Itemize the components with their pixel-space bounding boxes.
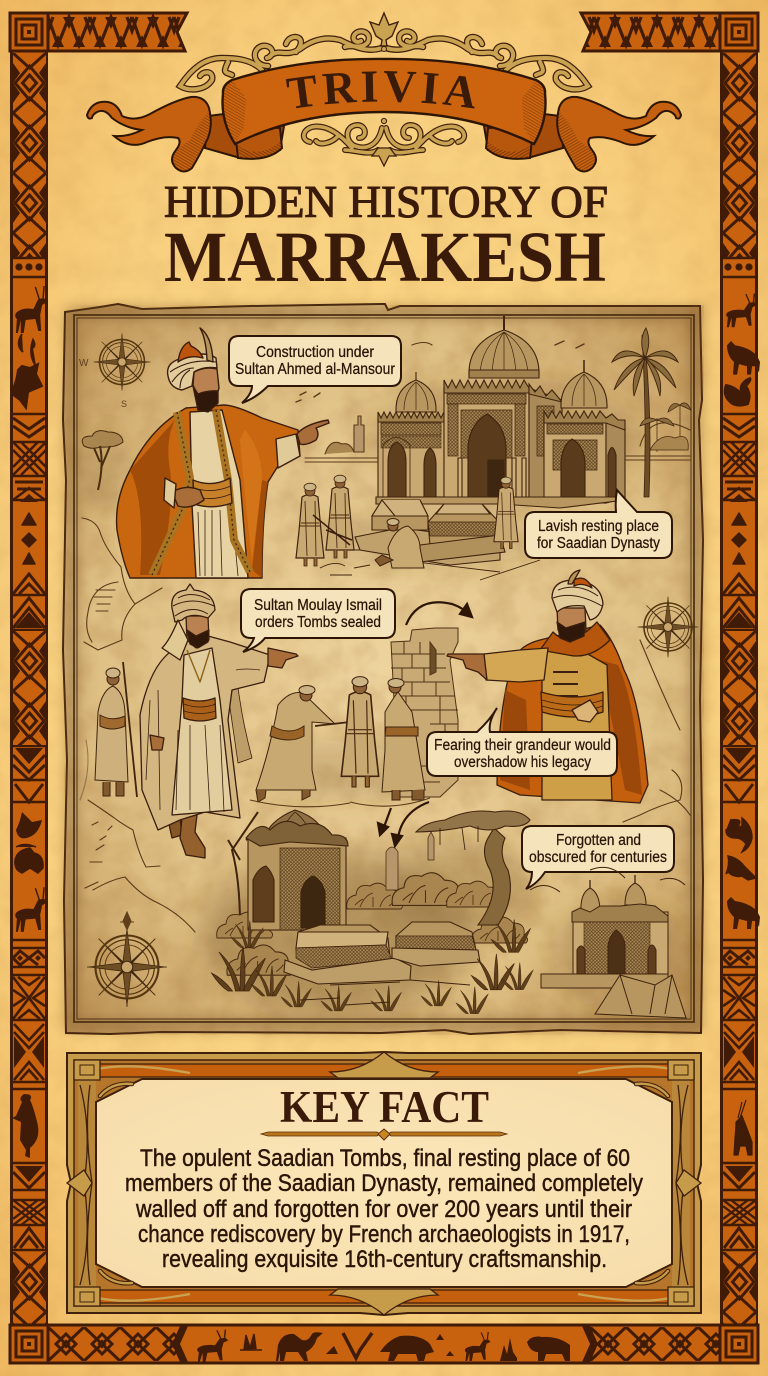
sarcophagus large: [284, 925, 411, 984]
ribbon shading: [222, 80, 546, 144]
key fact text: [125, 1145, 643, 1273]
right pavilion: [376, 360, 625, 508]
robe fold shading: [130, 420, 268, 578]
illustration: tombs under construction: [320, 500, 540, 580]
map frame lines: [74, 315, 694, 1022]
under-tunic: [172, 648, 232, 815]
background skyline with minaret and wall: [296, 341, 690, 462]
beard: [193, 386, 218, 412]
illustration: overgrown ruins: [212, 810, 533, 1014]
icon: compass rose top left: [79, 334, 150, 409]
workers group one: [296, 475, 518, 568]
figure: Sultan Ahmed al-Mansour: [117, 328, 329, 578]
bottom band with animals: [10, 1325, 758, 1363]
icon: compass rose top left: S: [121, 399, 127, 409]
title line 2: MARRAKESH: [164, 217, 606, 297]
cape: [497, 625, 648, 803]
icon: palm trees: [612, 328, 691, 497]
distant spire: [386, 832, 434, 890]
worker standing: [341, 677, 379, 787]
callout: resting place: for Saadian Dynasty: [537, 535, 660, 552]
callout: fearing grandeur: Fearing their grandeur would: [434, 737, 611, 754]
sash: [183, 698, 216, 721]
illustration: Saadian mausoleum complex: [376, 316, 625, 508]
main ribbon: [222, 59, 546, 144]
callout: resting place: [525, 490, 672, 558]
robe: [117, 405, 300, 578]
figure: Sultan Moulay Ismail: [140, 584, 298, 858]
panel: key fact: [67, 1052, 701, 1315]
corner scrollwork: [100, 1084, 668, 1283]
top right band: [581, 13, 758, 51]
foreground plants: [212, 919, 533, 1014]
figure: guard with spear: [95, 662, 137, 797]
workers walling up the tomb: [250, 628, 458, 807]
face and beard: [186, 616, 209, 648]
coat: [140, 636, 270, 830]
necklace: [187, 650, 210, 682]
left ribbon tail: [87, 97, 285, 172]
hood collar: [540, 622, 610, 656]
callout: forgotten: [522, 826, 674, 889]
icon: acacia tree: [82, 431, 123, 490]
coat: [542, 645, 612, 800]
parchment vignette: [72, 313, 696, 1024]
dead tree left: [228, 812, 262, 925]
left pavilion: [378, 372, 444, 497]
key fact text: chance rediscovery by French archaeologists in 1917,: [138, 1221, 630, 1248]
callout: construction: Construction under: [256, 344, 374, 361]
turban: [168, 354, 217, 390]
callout: Moulay Ismail: [241, 589, 395, 652]
turban crown: [178, 342, 203, 362]
title line 1: HIDDEN HISTORY OF: [164, 177, 608, 227]
turban: [552, 580, 603, 620]
lower scroll ornament: [304, 118, 464, 166]
callout: fearing grandeur: [427, 708, 617, 776]
right strip: [721, 51, 760, 1326]
panel: illustrated parchment map: [63, 304, 704, 1035]
gold trim: [152, 412, 190, 575]
cream text panel: [96, 1079, 672, 1287]
icon: compass rose bottom left: [87, 912, 167, 1007]
headcloth: [162, 620, 188, 660]
turban cap and feather: [574, 578, 592, 588]
callout: construction: Sultan Ahmed al-Mansour: [235, 361, 395, 378]
callout: Moulay Ismail: orders Tombs sealed: [255, 614, 381, 631]
hand at waist: [572, 700, 598, 722]
parchment sheet: [63, 304, 703, 1034]
tree right: [478, 828, 510, 925]
boots: [167, 815, 205, 858]
kneeling worker: [375, 518, 424, 568]
callout: construction: [229, 336, 401, 403]
heading: KEY FACT: [280, 1082, 489, 1132]
left strip: [11, 51, 47, 1326]
ornate frame: [67, 1052, 701, 1315]
title: [164, 177, 608, 297]
key fact text: members of the Saadian Dynasty, remained completely: [125, 1170, 643, 1197]
header banner: TRIVIA: [86, 11, 682, 172]
face: [193, 368, 219, 402]
brick wall: [391, 628, 458, 797]
pointing hand: [297, 420, 329, 444]
arrow: downward curve: [392, 802, 429, 846]
sepia tonal shading: [77, 375, 690, 1015]
parchment stains: [64, 305, 704, 1035]
callout: resting place: Lavish resting place: [538, 518, 659, 535]
map coast lines and hills: [80, 518, 690, 932]
top scroll ornament: [180, 13, 588, 89]
top left band: [10, 13, 187, 51]
face: [557, 608, 586, 640]
sash: [193, 478, 232, 507]
key fact text: revealing exquisite 16th-century craftsmanship.: [162, 1246, 607, 1273]
central hall: [444, 316, 562, 500]
arrow: curved to sultan: [406, 602, 472, 625]
hand on sash: [172, 487, 204, 507]
icon: compass right: [638, 597, 698, 657]
sleeve: [276, 434, 300, 468]
figure: sultan with orange cape: [447, 570, 648, 803]
worker bent: [382, 678, 425, 800]
key fact text: walled off and forgotten for over 200 years until their: [135, 1196, 632, 1223]
worker pulling: [256, 686, 350, 802]
key fact text: The opulent Saadian Tombs, final resting place of 60: [140, 1145, 630, 1172]
callout: forgotten: obscured for centuries: [529, 849, 667, 866]
hands: [268, 648, 298, 668]
sarcophagus small: [392, 922, 480, 966]
pointing hand: [447, 654, 487, 680]
shrubs behind: [217, 873, 528, 975]
feather: [200, 328, 213, 362]
right ribbon tail: [483, 97, 681, 172]
callout: fearing grandeur: overshadow his legacy: [454, 754, 591, 771]
turban: [172, 584, 215, 622]
callout: forgotten: Forgotten and: [556, 832, 641, 849]
heading divider: [261, 1129, 507, 1140]
sleeve: [484, 648, 548, 682]
banner word TRIVIA: TRIVIA: [286, 71, 474, 108]
ruined pavilion: [246, 810, 348, 930]
icon: compass rose top left: W: [79, 358, 89, 369]
callout: Moulay Ismail: Sultan Moulay Ismail: [254, 597, 382, 614]
draped cape behind: [227, 687, 252, 763]
sash: [541, 692, 603, 717]
illustration: small restored mausoleum: [530, 867, 686, 1018]
under-tunic: [190, 410, 248, 578]
arrow: downward left: [378, 808, 391, 835]
